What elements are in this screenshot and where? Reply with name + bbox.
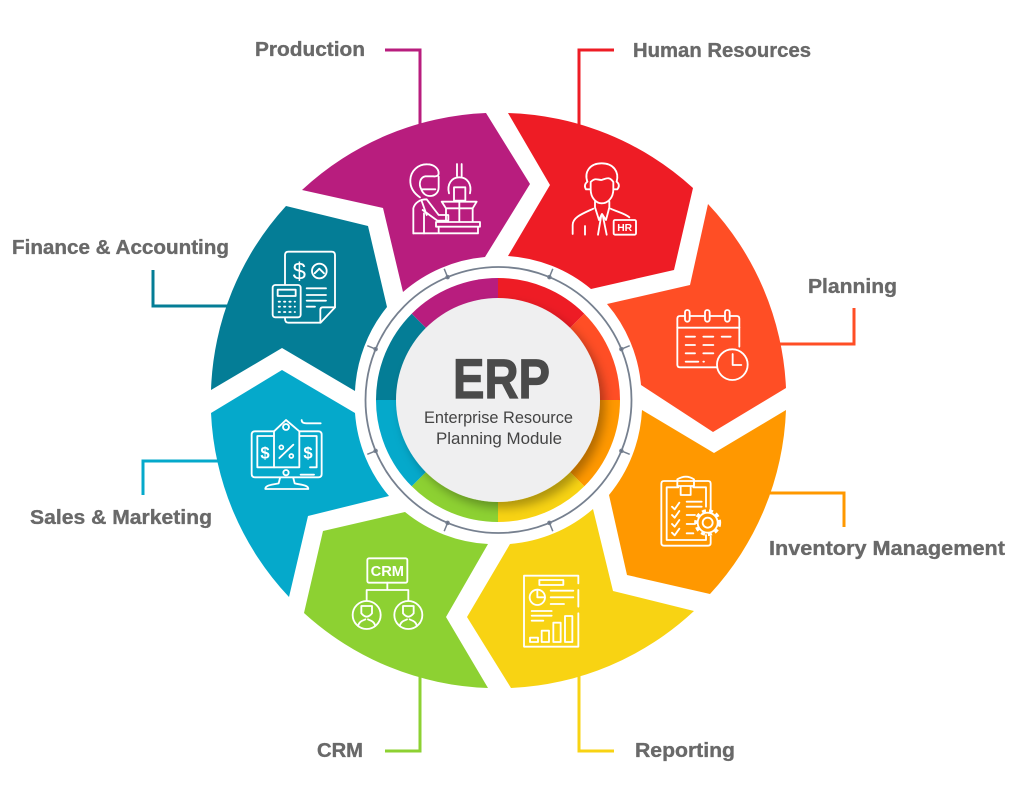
subtitle: Planning Module [436, 429, 562, 448]
panel: Production [302, 113, 530, 292]
icon: monitor with discount tag [252, 420, 322, 489]
outer ring with ticks [366, 267, 632, 533]
icon: calendar with clock [677, 310, 748, 380]
connector: CRM [385, 672, 420, 751]
label: Finance & Accounting: Finance & Accounting [12, 237, 229, 259]
panel: Human Resources [508, 113, 693, 289]
icon: HR employee [573, 163, 636, 235]
panel: Reporting [467, 509, 694, 688]
icon: report document with charts [524, 576, 578, 647]
icon: monitor with discount tag: $ [260, 443, 270, 462]
label: Inventory Management: Inventory Management [769, 538, 1005, 560]
connector: Sales & Marketing [143, 461, 220, 495]
label: CRM: CRM [317, 740, 363, 762]
label: Planning: Planning [808, 276, 897, 298]
connector: Reporting [579, 672, 614, 751]
panel: Inventory Management [609, 410, 786, 594]
panel: Planning [607, 204, 786, 432]
icon: CRM hierarchy with two contacts: CRM [371, 564, 404, 580]
label: Human Resources: Human Resources [633, 40, 811, 62]
icon: worker and robot arm packing boxes [410, 164, 480, 233]
connector: Production [385, 50, 420, 128]
icon: HR employee: HR [617, 223, 633, 234]
label: Production: Production [255, 39, 365, 61]
icon: financial document with calculator [273, 252, 335, 323]
icon: checklist clipboard with gear [661, 477, 720, 546]
panel: Sales & Marketing [211, 370, 389, 597]
panel: CRM [304, 512, 488, 688]
label: Sales & Marketing: Sales & Marketing [30, 507, 212, 529]
panel: Finance & Accounting [211, 206, 387, 391]
title: ERP: ERP [453, 347, 550, 410]
center disc with ERP title [396, 298, 600, 502]
center colour ring [376, 278, 620, 522]
icon: monitor with discount tag: $ [303, 443, 313, 462]
connector: Planning [778, 308, 854, 344]
connector: Inventory Management [770, 493, 844, 527]
icon: financial document with calculator: $ [293, 258, 306, 285]
label: Reporting: Reporting [635, 740, 735, 762]
connector: Finance & Accounting [153, 270, 230, 306]
connector: Human Resources [579, 50, 614, 128]
subtitle: Enterprise Resource [424, 408, 573, 427]
icon: CRM hierarchy with two contacts [353, 558, 422, 629]
